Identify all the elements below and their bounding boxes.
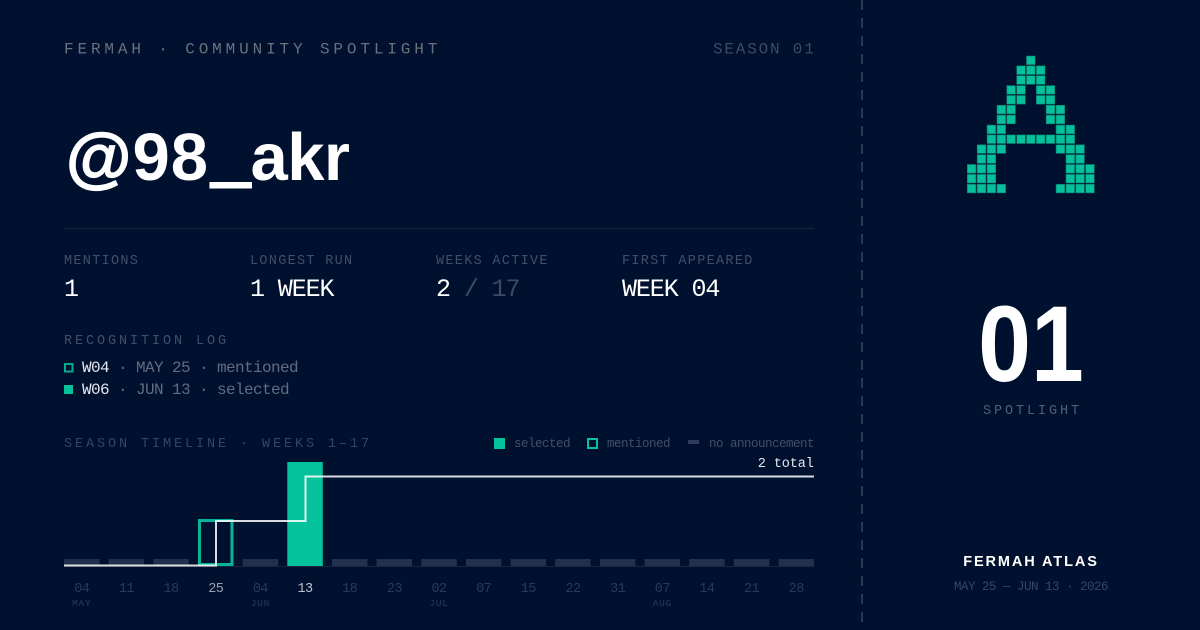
week axis labels: 22 [565,582,581,597]
handle title: @98 [66,120,209,195]
stat: first appeared [622,254,754,304]
stat: longest run [250,254,353,304]
week axis labels: JUN [251,598,270,609]
week axis labels: JUL [429,598,449,609]
week axis labels: 07 [655,582,670,597]
stat: first appeared: WEEK 04 [622,275,719,304]
week axis labels: 21 [744,582,760,597]
log row: W04 mentioned: W04 · MAY 25 · mentioned [82,359,298,377]
week axis labels: 15 [521,582,536,597]
week axis labels: 28 [789,582,804,597]
timeline chart [64,457,814,566]
week axis labels: 11 [119,582,134,597]
stat: weeks active: 2 / 17 [436,275,520,304]
header eyebrow: FERMAH · COMMUNITY SPOTLIGHT [64,40,441,58]
stat: mentions: 1 [64,275,78,304]
week axis labels: 23 [387,582,402,597]
week axis labels: 07 [476,582,492,597]
timeline heading: SEASON TIMELINE · WEEKS 1–17 [64,437,372,452]
stat: mentions [64,254,139,304]
legend: no announcement: no announcement [709,437,814,451]
week axis labels: 18 [342,582,358,597]
week axis labels: 31 [610,582,626,597]
handle title: akr [251,120,350,195]
week axis labels: AUG [653,598,672,609]
bar: W04 mentioned [199,520,232,564]
log heading: RECOGNITION LOG [64,334,229,349]
cumulative step line [64,476,814,566]
spotlight number: 01 [978,283,1084,404]
log row: W06 selected: W06 · JUN 13 · selected [82,381,289,399]
legend: selected: selected [514,437,570,451]
week axis labels: 02 [431,582,447,597]
bar: W06 selected [287,462,323,566]
week axis labels: MAY [72,598,91,609]
stat: weeks active [436,254,549,304]
legend [494,437,814,451]
stat: weeks active: WEEKS ACTIVE [436,254,549,269]
week axis labels: 25 [208,582,224,597]
stat: first appeared: FIRST APPEARED [622,254,754,269]
week axis labels: 04 [74,582,90,597]
total label: 2 total [758,457,814,472]
week axis labels: 13 [298,582,313,597]
icon: pixel letter A logo [967,56,1094,193]
brand name: FERMAH ATLAS [963,554,1099,570]
stat: longest run: 1 WEEK [250,275,335,304]
week axis labels: 04 [253,582,268,597]
week axis labels: 14 [699,582,715,597]
legend: mentioned: mentioned [607,437,670,451]
stat: longest run: LONGEST RUN [250,254,353,269]
recognition log [64,334,298,399]
date range: MAY 25 — JUN 13 · 2026 [954,580,1108,594]
week axis labels [72,582,804,609]
handle title: _ [211,118,251,194]
season label: SEASON 01 [713,40,816,58]
spotlight label: SPOTLIGHT [983,404,1082,419]
stat: mentions: MENTIONS [64,254,139,269]
week axis labels: 18 [164,582,179,597]
